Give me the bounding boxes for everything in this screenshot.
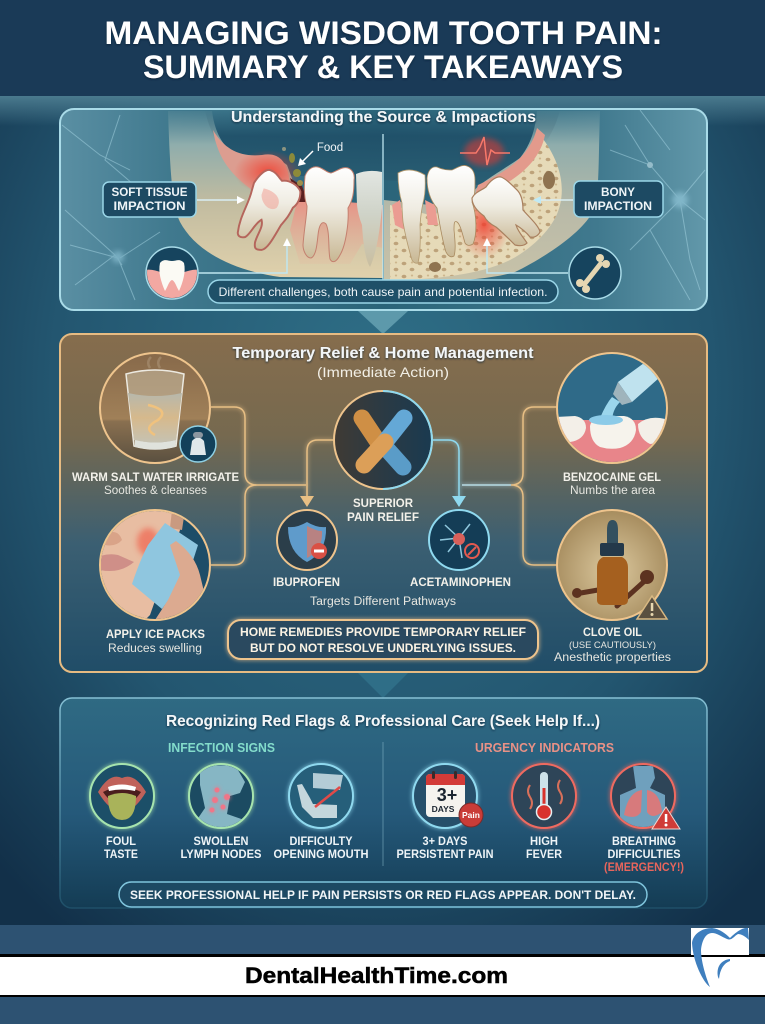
label: foul taste: TASTE [104, 849, 138, 861]
label: ibuprofen: IBUPROFEN [273, 577, 340, 589]
caption pill [208, 280, 558, 303]
left gum band [213, 130, 300, 200]
icon: benzocaine gel [555, 353, 670, 470]
label: acetaminophen: ACETAMINOPHEN [410, 577, 511, 589]
right gum band [474, 128, 545, 198]
label: breathing difficulties: BREATHING [612, 836, 676, 848]
food label: Food [317, 142, 343, 154]
left molar [303, 167, 354, 262]
label: clove oil: (USE CAUTIOUSLY) [569, 640, 656, 651]
label: difficulty opening mouth: DIFFICULTY [290, 836, 353, 848]
warning triangle [637, 596, 667, 619]
right front tooth [398, 170, 425, 263]
label: difficulty opening mouth [274, 836, 368, 861]
subheading: immediate action: (Immediate Action) [317, 364, 449, 380]
icon: acetaminophen neuron [429, 510, 489, 570]
label: breathing difficulties: (EMERGENCY!) [604, 862, 684, 874]
label: swollen lymph nodes: SWOLLEN [194, 836, 248, 848]
right jaw bone [384, 111, 600, 281]
label: bony impaction: IMPACTION [584, 201, 652, 213]
label: persistent pain [396, 836, 494, 861]
label: apply ice packs: Reduces swelling [108, 643, 202, 655]
callout: home remedies: HOME REMEDIES PROVIDE TEMPORARY RELIEF [240, 625, 526, 639]
icon: thermometer [512, 764, 576, 828]
icon: crossed capsules [334, 391, 432, 489]
label: warm salt water: Soothes & cleanses [104, 485, 207, 497]
label: superior pain relief: SUPERIOR [353, 498, 414, 510]
website name: DentalHealthTime.com [245, 963, 508, 988]
label: foul taste [104, 836, 138, 861]
label: clove oil: CLOVE OIL [583, 627, 642, 639]
central dark teal backdrop [205, 110, 560, 185]
label: bony impaction [533, 181, 663, 217]
icon: swollen lymph nodes [189, 764, 253, 830]
center divider [382, 134, 384, 282]
label: swollen lymph nodes: LYMPH NODES [180, 849, 262, 861]
label: bony impaction: BONY [601, 187, 635, 199]
icon: foul taste tongue [90, 764, 154, 828]
label: difficulty opening mouth: OPENING MOUTH [274, 849, 368, 861]
panel: understanding the source and impactions [60, 109, 707, 334]
logo: tooth [691, 928, 749, 987]
icon: clove oil bottle [557, 510, 667, 620]
label: soft tissue impaction: SOFT TISSUE [112, 187, 188, 199]
icon: gum and tooth [145, 238, 291, 300]
illustration: jaw and impacted teeth [168, 111, 600, 282]
panel: temporary relief and home management [60, 334, 707, 698]
icon: ibuprofen shield [277, 510, 337, 570]
arrow: to ibuprofen [300, 496, 314, 507]
label: superior pain relief [347, 498, 419, 524]
footer strip [0, 954, 765, 997]
food gap [290, 178, 308, 202]
footer band background [0, 925, 765, 1024]
right wisdom tooth [472, 177, 540, 246]
pain pulse [460, 137, 510, 166]
icon: three days calendar: DAYS [432, 804, 455, 814]
panel: red flags and professional care [60, 698, 707, 908]
label: persistent pain: 3+ DAYS [422, 836, 468, 848]
heading: temporary relief: Temporary Relief & Home Management [232, 345, 534, 362]
label: breathing difficulties [604, 836, 684, 874]
label: benzocaine gel [563, 472, 661, 497]
label: persistent pain: PERSISTENT PAIN [396, 849, 494, 861]
label: warm salt water: WARM SALT WATER IRRIGATE [72, 472, 239, 484]
label: targets different pathways: Targets Different Pathways [310, 596, 456, 608]
left wisdom tooth [238, 170, 300, 250]
inflammation glows [234, 150, 302, 194]
header band [0, 0, 765, 96]
label: foul taste: FOUL [106, 836, 136, 848]
label: apply ice packs: APPLY ICE PACKS [106, 629, 205, 641]
arrow: to acetaminophen [452, 496, 466, 507]
callout: home remedies [228, 620, 538, 659]
label: soft tissue impaction: IMPACTION [114, 201, 186, 213]
label: apply ice packs [106, 629, 205, 655]
label: benzocaine gel: Numbs the area [570, 485, 656, 497]
icon: three days calendar: Pain [462, 810, 480, 820]
icon: glass of warm salt water [100, 353, 216, 463]
label: swollen lymph nodes [180, 836, 262, 861]
left front tooth, faded [356, 171, 382, 267]
title: MANAGING WISDOM TOOTH PAIN: [104, 15, 662, 51]
left jaw bone [168, 111, 383, 278]
label: benzocaine gel: BENZOCAINE GEL [563, 472, 661, 484]
title: SUMMARY & KEY TAKEAWAYS [143, 49, 623, 85]
icon: three days calendar [413, 764, 483, 828]
label: clove oil: Anesthetic properties [554, 652, 671, 664]
connector lines [211, 407, 557, 565]
label: warm salt water [72, 472, 239, 497]
callout: seek professional help [119, 882, 647, 907]
label: high fever: FEVER [526, 849, 563, 861]
caption pill: Different challenges, both cause pain and potential infection. [218, 285, 548, 299]
callout: home remedies: BUT DO NOT RESOLVE UNDERLYING ISSUES. [250, 641, 516, 655]
nerve texture left and right [62, 110, 705, 300]
label: clove oil [554, 627, 671, 664]
right molar [427, 165, 476, 257]
title [104, 15, 662, 85]
callout: seek professional help: SEEK PROFESSIONAL HELP IF PAIN PERSISTS OR RED FLAGS APPEAR. DON'T DELAY. [130, 888, 636, 902]
subheading: urgency indicators: URGENCY INDICATORS [475, 740, 614, 755]
heading: understanding: Understanding the Source & Impactions [231, 109, 536, 126]
icon: three days calendar: 3+ [437, 785, 457, 805]
icon: bone [483, 238, 621, 299]
label: superior pain relief: PAIN RELIEF [347, 512, 419, 524]
icon: ice pack on cheek [100, 510, 210, 625]
label: high fever: HIGH [530, 836, 558, 848]
label: soft tissue impaction [103, 182, 245, 217]
heading: red flags: Recognizing Red Flags & Professional Care (Seek Help If...) [166, 713, 600, 730]
icon: lungs with warning [611, 764, 680, 830]
food label [282, 142, 343, 186]
label: breathing difficulties: DIFFICULTIES [608, 849, 681, 861]
subheading: infection signs: INFECTION SIGNS [168, 740, 275, 755]
right porous bone [390, 135, 562, 280]
icon: difficulty opening mouth [289, 764, 353, 828]
label: high fever [526, 836, 563, 861]
